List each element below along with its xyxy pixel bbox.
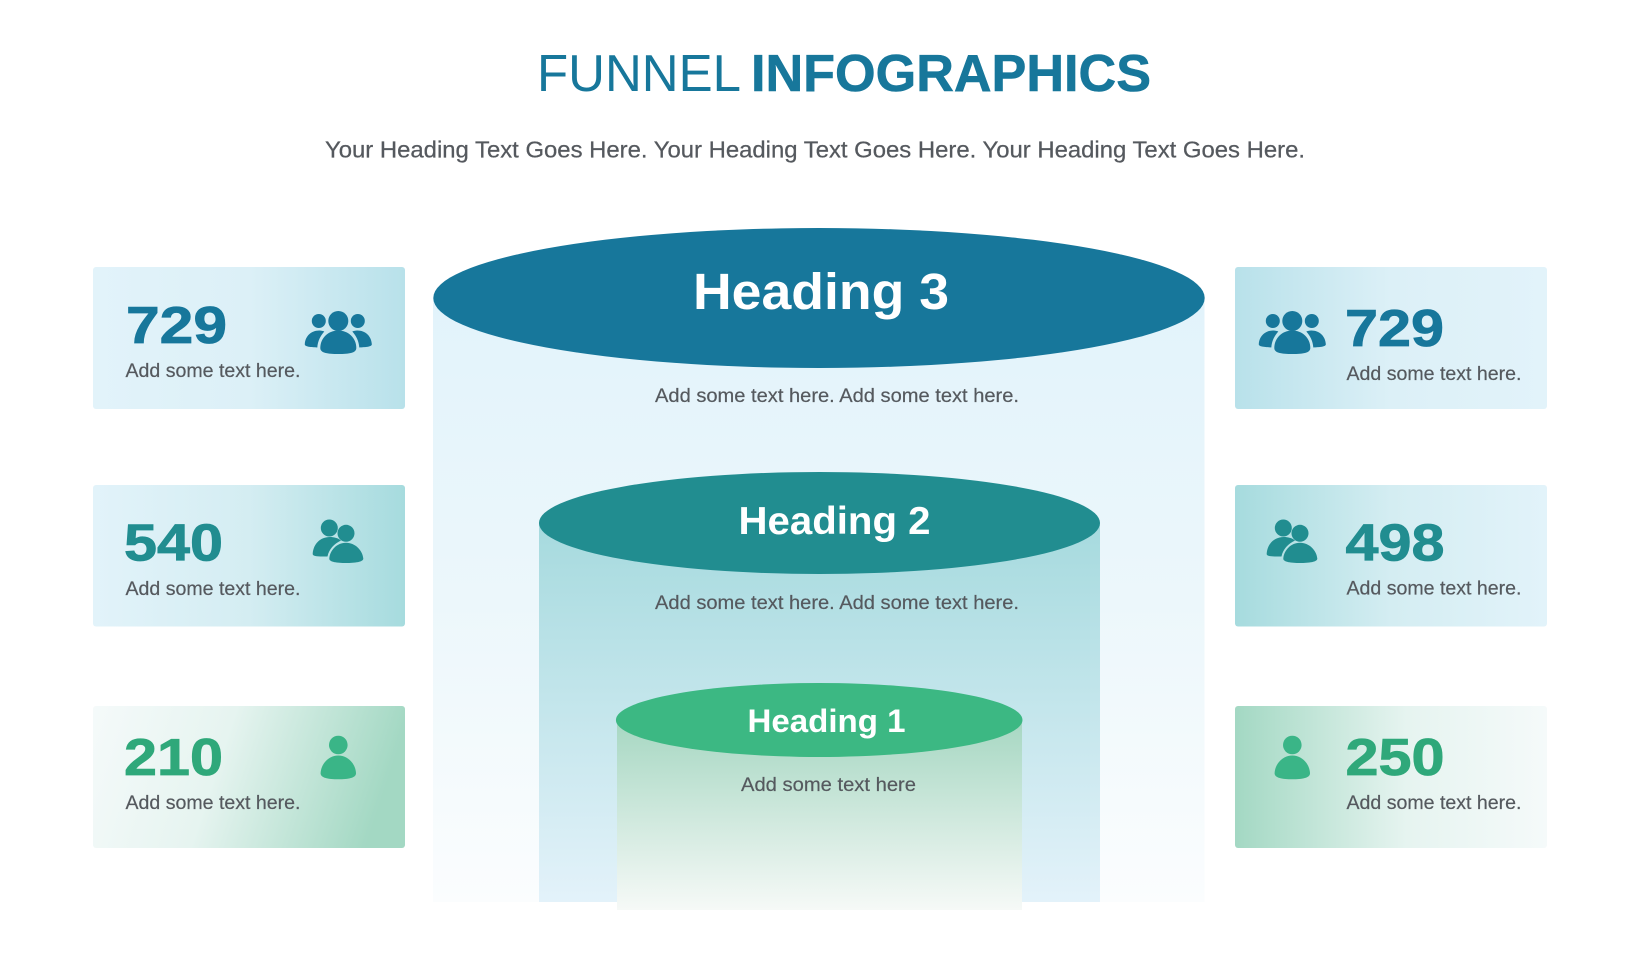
card: right 250: Add some text here.: [1346, 792, 1522, 814]
card: left 729: Add some text here.: [126, 360, 300, 382]
card: left 729: 729: [126, 297, 227, 355]
card: right 498: [1235, 485, 1547, 626]
funnel tier: heading 3: Add some text here. Add some text here.: [655, 385, 1019, 407]
card: right 250: [1235, 706, 1547, 848]
card: left 210: 210: [124, 729, 223, 787]
card: left 540: 540: [124, 514, 223, 572]
icon: two people: [313, 520, 363, 563]
title: FUNNEL: [537, 45, 741, 103]
card: left 210: Add some text here.: [126, 792, 300, 814]
icon: two people: [1267, 520, 1317, 563]
funnel tier: heading 1: Heading 1: [748, 703, 906, 739]
subtitle: Your Heading Text Goes Here. Your Heading Text Goes Here. Your Heading Text Goes Here.: [325, 136, 1305, 162]
funnel tier: heading 2: Heading 2: [738, 500, 930, 543]
card: left 540: Add some text here.: [126, 578, 300, 600]
funnel tier: heading 1: Add some text here: [741, 774, 916, 796]
icon: three people: [305, 311, 372, 354]
card: right 498: 498: [1346, 514, 1444, 572]
card: left 729: [93, 267, 405, 409]
card: right 498: Add some text here.: [1346, 578, 1522, 600]
icon: person: [321, 736, 356, 779]
card: right 729: Add some text here.: [1346, 363, 1522, 385]
card: right 250: 250: [1346, 729, 1444, 787]
icon: three people: [1259, 311, 1326, 354]
icon: person: [1275, 736, 1310, 779]
card: right 729: 729: [1345, 300, 1444, 358]
funnel tier: heading 3: Heading 3: [693, 263, 949, 320]
title: [537, 45, 1151, 103]
funnel tier: heading 2: [539, 472, 1100, 902]
card: left 210: [93, 706, 405, 848]
card: left 540: [93, 485, 405, 626]
card: right 729: [1235, 267, 1547, 409]
funnel tier: heading 1: [616, 683, 1022, 910]
funnel tier: heading 3: [433, 228, 1205, 902]
funnel tier: heading 2: Add some text here. Add some text here.: [655, 592, 1019, 614]
title: INFOGRAPHICS: [751, 45, 1151, 103]
